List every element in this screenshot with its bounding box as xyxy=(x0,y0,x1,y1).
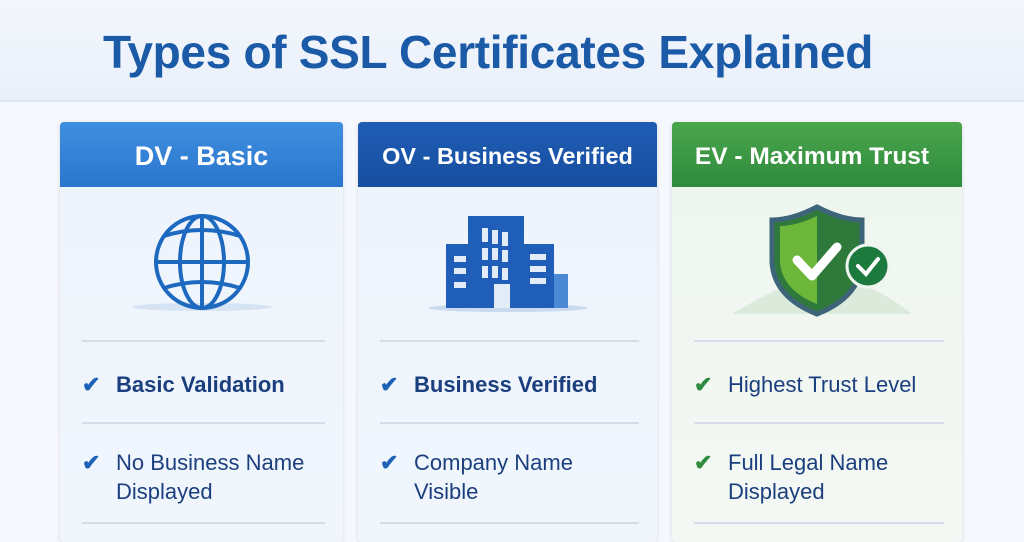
panel: OV: Business Verified xyxy=(414,372,597,397)
panel: EV: Full Legal Name xyxy=(728,450,888,475)
panel: DV: ✔ xyxy=(82,450,100,475)
icon: shield xyxy=(732,204,912,317)
panel: EV: Displayed xyxy=(728,479,825,504)
header: DV: DV - Basic xyxy=(135,141,268,171)
panel: EV: Highest Trust Level xyxy=(728,372,916,397)
panel: DV: Basic Validation xyxy=(116,372,285,397)
item xyxy=(694,450,888,504)
panel: OV: ✔ xyxy=(380,450,398,475)
header: OV: OV - Business Verified xyxy=(382,143,633,169)
header: EV xyxy=(672,122,962,187)
item xyxy=(694,372,916,397)
item xyxy=(380,372,597,397)
panel: OV: ✔ xyxy=(380,372,398,397)
item xyxy=(82,450,304,504)
panel: OV xyxy=(358,122,657,542)
header: EV: EV - Maximum Trust xyxy=(695,142,929,170)
panel: EV: ✔ xyxy=(694,450,712,475)
icon: globe xyxy=(132,214,272,311)
header: OV xyxy=(358,122,657,187)
panel: EV: ✔ xyxy=(694,372,712,397)
icon: building xyxy=(428,216,588,312)
title: Types of SSL Certificates Explained xyxy=(103,26,873,78)
panel: OV: Visible xyxy=(414,479,478,504)
panel: OV: Company Name xyxy=(414,450,573,475)
item xyxy=(380,450,573,504)
header: DV xyxy=(60,122,343,187)
item xyxy=(82,372,285,397)
panel: DV xyxy=(60,122,343,542)
panel: DV: No Business Name xyxy=(116,450,304,475)
panel: EV xyxy=(672,122,962,542)
panel: DV: Displayed xyxy=(116,479,213,504)
panel: DV: ✔ xyxy=(82,372,100,397)
